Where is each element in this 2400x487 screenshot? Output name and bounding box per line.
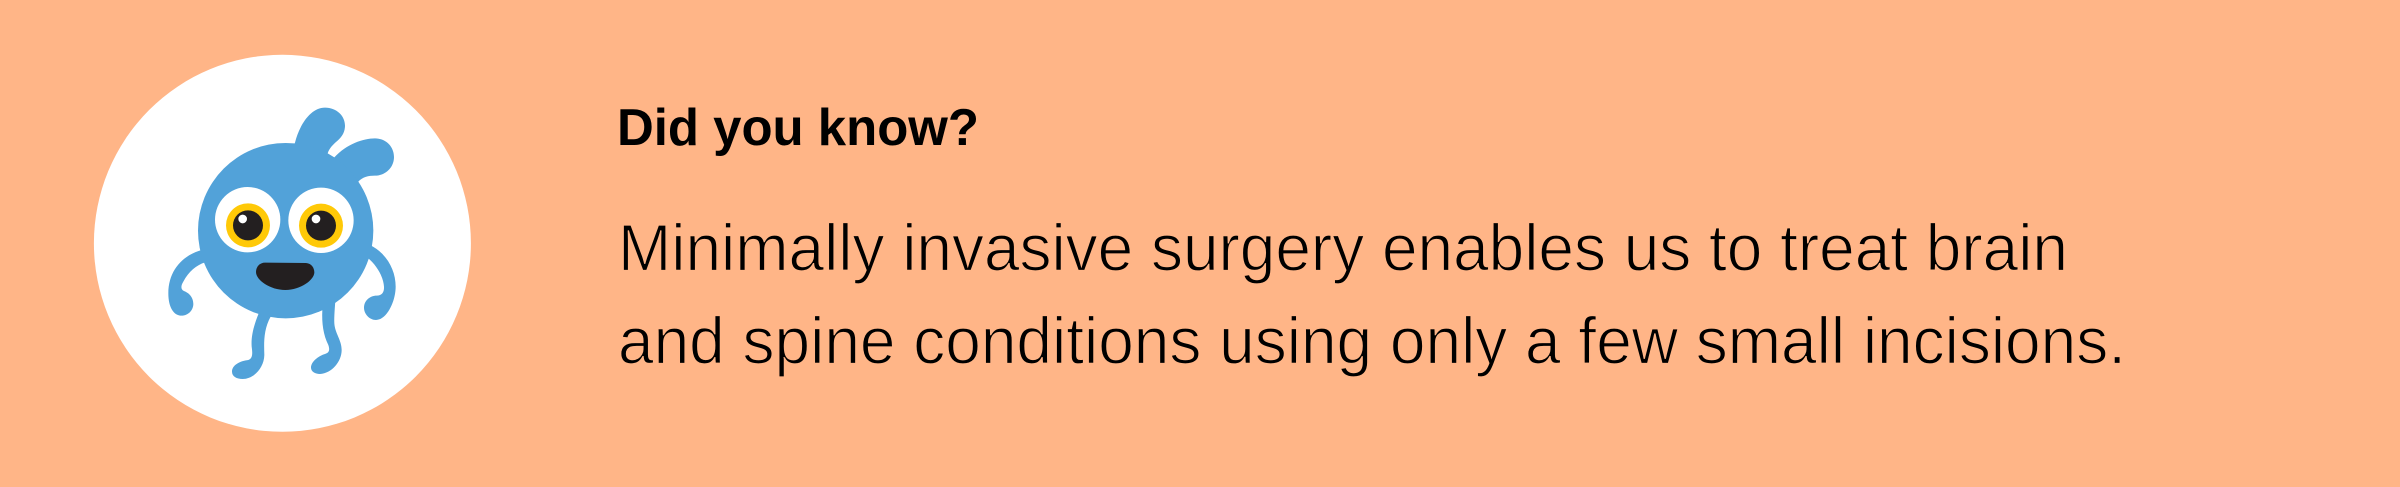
monster left arm	[168, 250, 205, 316]
monster left leg	[232, 313, 271, 379]
right eye	[288, 188, 354, 253]
heading: Did you know?	[617, 99, 979, 157]
icon: blue monster mascot	[168, 108, 396, 379]
monster right leg	[311, 300, 342, 374]
monster mouth	[256, 263, 314, 290]
body line 1: Minimally invasive surgery enables us to treat brain	[618, 210, 2068, 284]
monster body	[198, 143, 373, 318]
monster antennae	[293, 108, 394, 197]
body text	[618, 210, 2126, 378]
body line 2: and spine conditions using only a few small incisions.	[618, 304, 2126, 378]
monster right arm	[364, 245, 396, 320]
left eye	[215, 187, 280, 252]
icon: white circle badge	[94, 55, 471, 432]
